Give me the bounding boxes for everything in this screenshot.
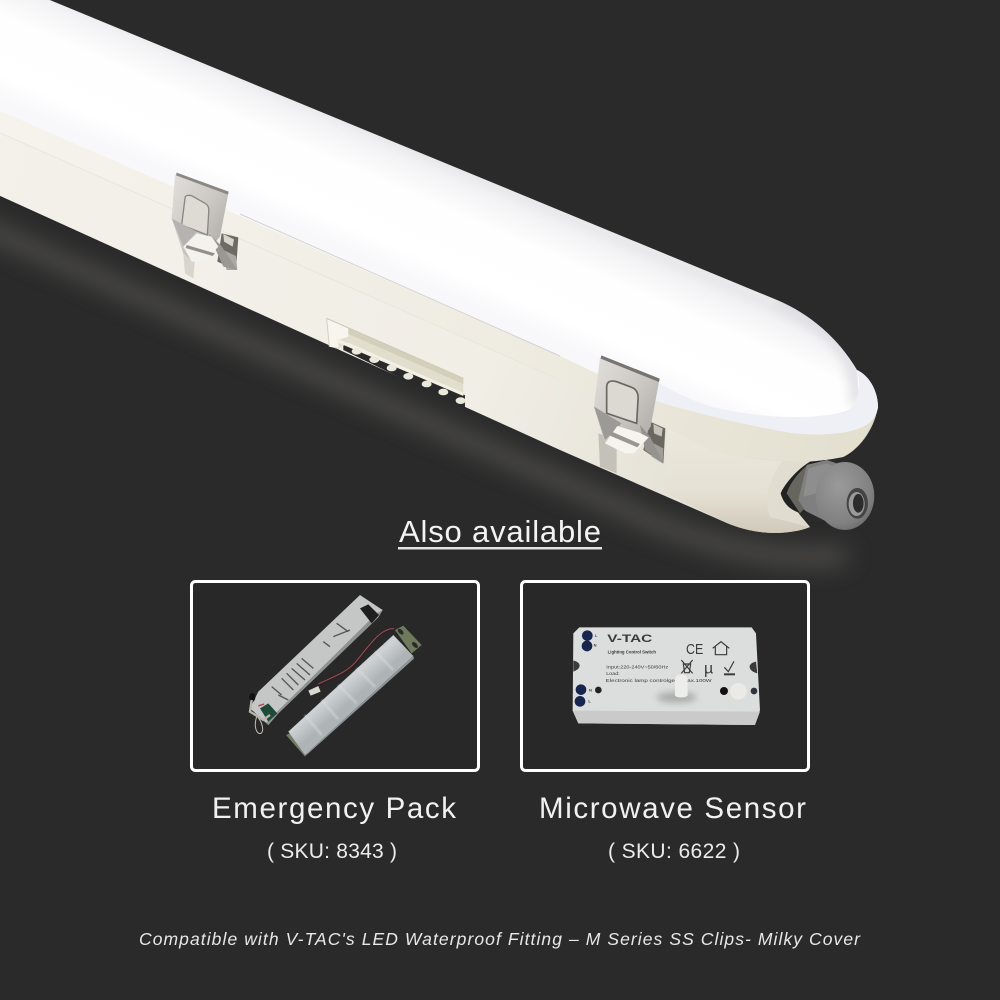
sensor label text: Lighting Control Switch (608, 650, 656, 655)
sensor label text: CE (686, 642, 703, 658)
sensor lens and indicators (595, 683, 757, 700)
emergency pack product photo (249, 595, 422, 757)
sensor label text: N (594, 643, 597, 648)
cover dome shading (777, 300, 857, 405)
panel: emergency pack (192, 582, 478, 770)
sensor label text: Electronic lamp controlgear max.100W (606, 678, 712, 684)
LED waterproof fitting lamp (0, 0, 878, 533)
battery connector wire (308, 629, 394, 696)
sensor label text: L (588, 699, 591, 704)
cover end lip (640, 370, 878, 434)
vent slot with teeth (327, 318, 466, 409)
stainless steel clip, left (172, 173, 238, 278)
panel: microwave sensor (522, 582, 808, 770)
housing seam (0, 132, 560, 380)
sensor label text: Load: (606, 671, 620, 677)
cable gland (781, 460, 874, 530)
sensor label text: N (589, 687, 592, 692)
housing end shading (667, 428, 810, 533)
lamp housing (0, 100, 878, 533)
sku: emergency pack: ( SKU: 8343 ) (267, 840, 397, 863)
sensor label text: V-TAC (607, 633, 652, 645)
sensor label text: L (595, 633, 598, 638)
sku: microwave sensor: ( SKU: 6622 ) (608, 840, 740, 863)
caption: microwave sensor: Microwave Sensor (539, 792, 806, 825)
caption: emergency pack (212, 792, 456, 863)
battery pack (286, 626, 422, 757)
reflected glow under the lamp (0, 226, 840, 557)
caption: emergency pack: Emergency Pack (212, 792, 456, 825)
sensor label text: µ (704, 660, 713, 677)
microwave sensor product photo (573, 627, 760, 725)
heading: also available: Also available (399, 514, 601, 549)
driver unit (249, 595, 383, 734)
stainless steel clip, right (594, 355, 665, 473)
footer note: Compatible with V-TAC's LED Waterproof Fitting – M Series SS Clips- Milky Cover (139, 929, 861, 949)
antenna pin (657, 674, 697, 703)
sensor label text (588, 633, 713, 704)
lamp housing band (0, 110, 873, 461)
sensor body (573, 627, 760, 725)
terminals (575, 630, 593, 707)
compliance icons (681, 642, 735, 674)
caption: microwave sensor (539, 792, 806, 863)
mounting notches (573, 661, 757, 673)
sensor label text: Input:220-240V~50/60Hz (606, 664, 669, 670)
cover seam (240, 214, 560, 356)
milky cover (0, 0, 878, 434)
